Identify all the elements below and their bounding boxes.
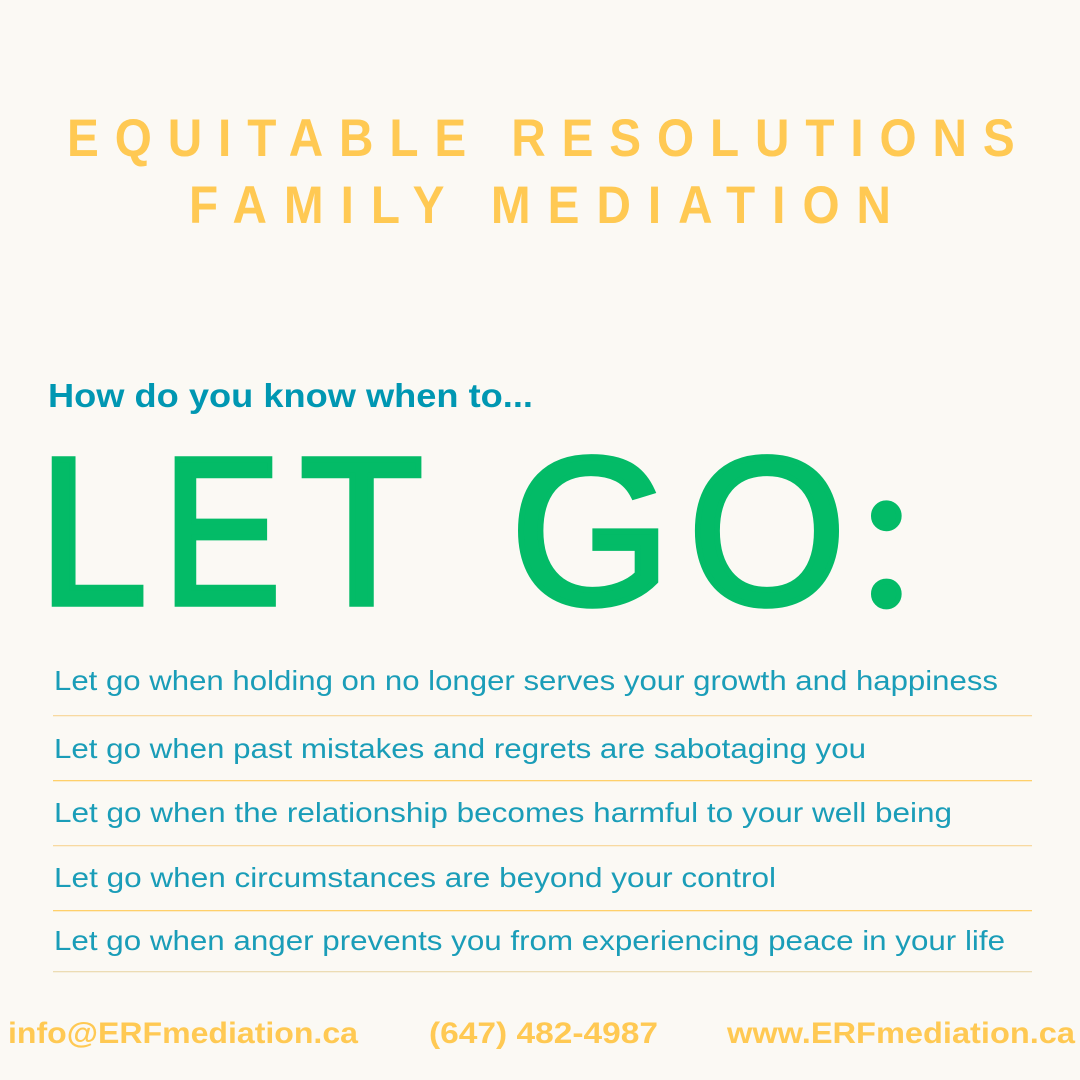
subheading: How do you know when to... <box>48 377 533 414</box>
email: info@ERFmediation.ca <box>8 1017 358 1050</box>
main heading: let go: T <box>300 414 423 649</box>
list of reasons to let go <box>53 665 1032 972</box>
title: organisation name: FAMILY MEDIATION <box>189 175 891 235</box>
footer contact details <box>8 1017 1075 1050</box>
reason 4: Let go when circumstances are beyond your control <box>54 862 776 893</box>
reason 2: Let go when past mistakes and regrets are sabotaging you <box>54 733 866 764</box>
website: www.ERFmediation.ca <box>726 1017 1075 1050</box>
reason 1: Let go when holding on no longer serves your growth and happiness <box>54 665 998 696</box>
main heading: let go: O <box>688 413 846 648</box>
phone: (647) 482-4987 <box>429 1017 658 1050</box>
title: organisation name: EQUITABLE RESOLUTIONS <box>67 108 1015 168</box>
reason 5: Let go when anger prevents you from experiencing peace in your life <box>54 925 1005 956</box>
main heading: let go: L <box>38 413 147 648</box>
main heading: let go: : <box>857 414 916 651</box>
main heading: let go: G <box>511 415 671 649</box>
main heading: let go: E <box>163 415 281 649</box>
title: organisation name <box>67 108 1015 235</box>
main heading: let go <box>38 413 916 651</box>
reason 3: Let go when the relationship becomes harmful to your well being <box>54 797 952 828</box>
